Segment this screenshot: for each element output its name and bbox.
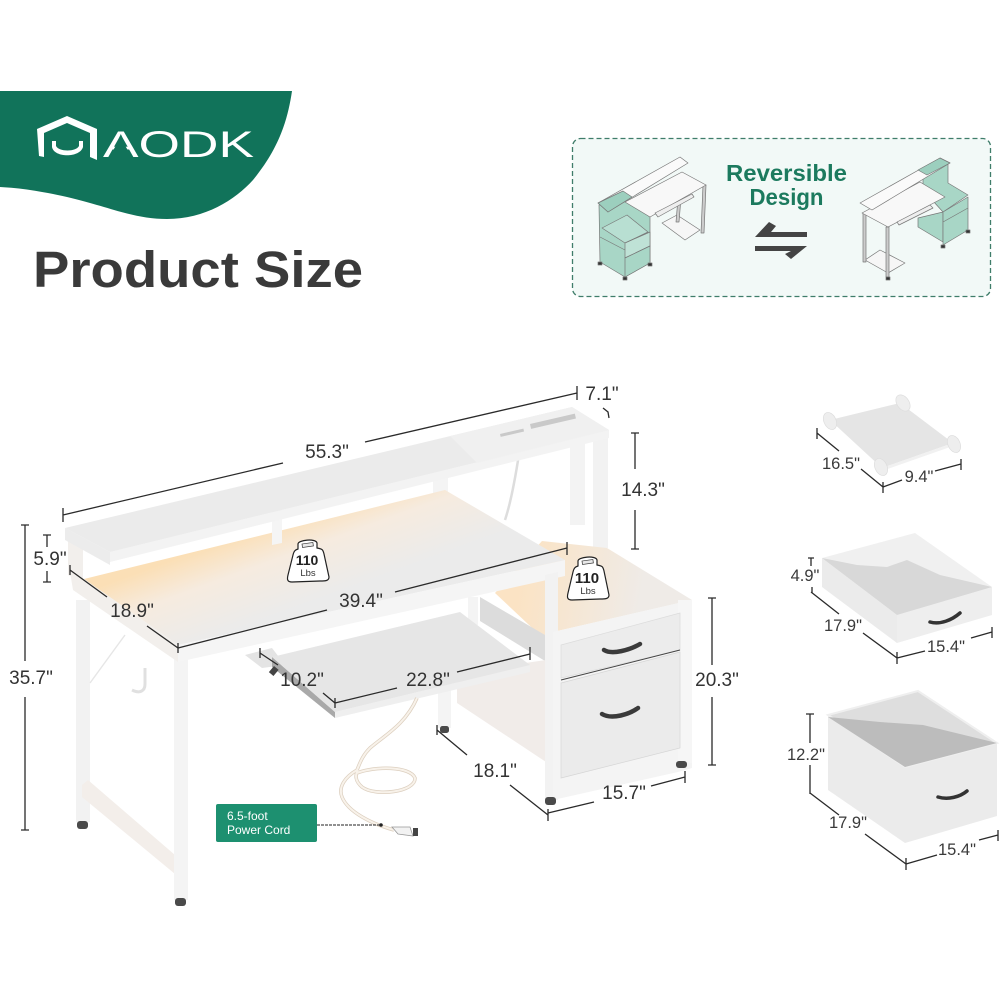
dimensions: tray bbox=[817, 428, 961, 493]
heading: reversible design: Reversible bbox=[726, 160, 847, 186]
component: deep drawer bbox=[787, 691, 998, 870]
weight badge: desktop: Lbs bbox=[300, 568, 316, 579]
inner drawer rail bbox=[480, 597, 545, 661]
component: deep drawer: 17.9" bbox=[829, 814, 867, 832]
weight badge: desktop bbox=[287, 540, 329, 582]
bottom drawer bbox=[561, 652, 680, 778]
mini desk: cabinet on left bbox=[598, 157, 706, 280]
callout: power cord: 6.5-foot bbox=[227, 809, 268, 823]
heading: reversible design bbox=[726, 160, 847, 210]
dimension: overall width bbox=[63, 386, 577, 522]
dimension: tray depth bbox=[260, 648, 335, 703]
dimension: desk depth: 18.9" bbox=[110, 601, 154, 622]
icon: swap arrows bbox=[755, 222, 807, 259]
mini desk: cabinet on right bbox=[860, 158, 970, 280]
dimension: shelf depth bbox=[585, 384, 619, 418]
hutch rear uprights bbox=[433, 430, 608, 548]
desk illustration bbox=[65, 407, 692, 906]
component: keyboard tray bbox=[817, 392, 963, 493]
dimension: cabinet depth: 18.1" bbox=[473, 761, 517, 782]
dimension: desk depth bbox=[70, 565, 178, 653]
usb and socket panel bbox=[500, 414, 576, 437]
power cable behind desk bbox=[505, 454, 519, 520]
hutch shelf bbox=[65, 407, 609, 582]
dimension: desk height: 35.7" bbox=[9, 668, 53, 689]
front left leg bbox=[174, 655, 188, 906]
rail support bbox=[468, 597, 478, 625]
weight badge: cabinet bbox=[567, 557, 609, 600]
dimension: hutch height: 14.3" bbox=[621, 480, 665, 501]
file cabinet bbox=[545, 600, 692, 805]
desktop bbox=[70, 490, 565, 800]
dimension: cabinet height bbox=[695, 598, 739, 765]
plug bbox=[392, 827, 418, 836]
dimension: hutch height bbox=[621, 433, 665, 549]
title: Product Size bbox=[33, 241, 363, 298]
component: keyboard tray: 16.5" bbox=[822, 455, 860, 473]
drawer handles bbox=[602, 644, 640, 716]
component: keyboard tray: 9.4" bbox=[905, 468, 934, 486]
tray brackets bbox=[821, 392, 963, 478]
component: shallow drawer: 17.9" bbox=[824, 617, 862, 635]
dimension: desk width: 39.4" bbox=[339, 591, 383, 612]
dimension: tray depth: 10.2" bbox=[280, 670, 324, 691]
rear desk leg bbox=[438, 660, 451, 733]
dimension: cabinet height: 20.3" bbox=[695, 670, 739, 691]
brand banner bbox=[0, 91, 292, 219]
dimension: overall width: 55.3" bbox=[305, 442, 349, 463]
power cord bbox=[341, 698, 417, 830]
callout: power cord bbox=[216, 804, 383, 842]
top drawer bbox=[561, 613, 680, 678]
weight badge: desktop: 110 bbox=[296, 552, 319, 568]
logo icon bbox=[37, 116, 97, 160]
dimension: cabinet depth bbox=[437, 725, 548, 821]
dimensions: shallow drawer bbox=[808, 558, 992, 664]
component: shallow drawer: 4.9" bbox=[791, 567, 820, 585]
dimension: shelf clearance bbox=[33, 535, 67, 582]
weight badge: cabinet: 110 bbox=[575, 570, 599, 587]
component: deep drawer: 15.4" bbox=[938, 841, 976, 859]
dimension: cabinet width bbox=[548, 771, 685, 813]
dimension: tray width bbox=[335, 647, 530, 708]
component: deep drawer: 12.2" bbox=[787, 746, 825, 764]
left rear leg bbox=[76, 600, 90, 829]
open side panel bbox=[457, 660, 546, 762]
panel: reversible design bbox=[572, 138, 990, 296]
component: shallow drawer bbox=[791, 533, 992, 664]
dimension: desk height bbox=[9, 525, 53, 830]
dimension: shelf clearance: 5.9" bbox=[33, 549, 67, 570]
dimension: desk width bbox=[178, 542, 567, 648]
dimension: cabinet width: 15.7" bbox=[602, 783, 646, 804]
headphone hook and wire bbox=[90, 635, 145, 692]
weight badge: cabinet: Lbs bbox=[580, 586, 596, 597]
heading: reversible design: Design bbox=[750, 184, 824, 210]
callout: power cord: Power Cord bbox=[227, 823, 290, 837]
dimensions: deep drawer bbox=[806, 714, 998, 870]
logo wordmark: AODK bbox=[103, 124, 254, 165]
cabinet top bbox=[495, 541, 692, 640]
dimension: tray width: 22.8" bbox=[406, 670, 450, 691]
component: shallow drawer: 15.4" bbox=[927, 638, 965, 656]
crossbar bbox=[82, 780, 175, 874]
keyboard tray bbox=[245, 612, 530, 718]
dimension: shelf depth: 7.1" bbox=[585, 384, 619, 405]
cabinet feet bbox=[545, 761, 687, 805]
